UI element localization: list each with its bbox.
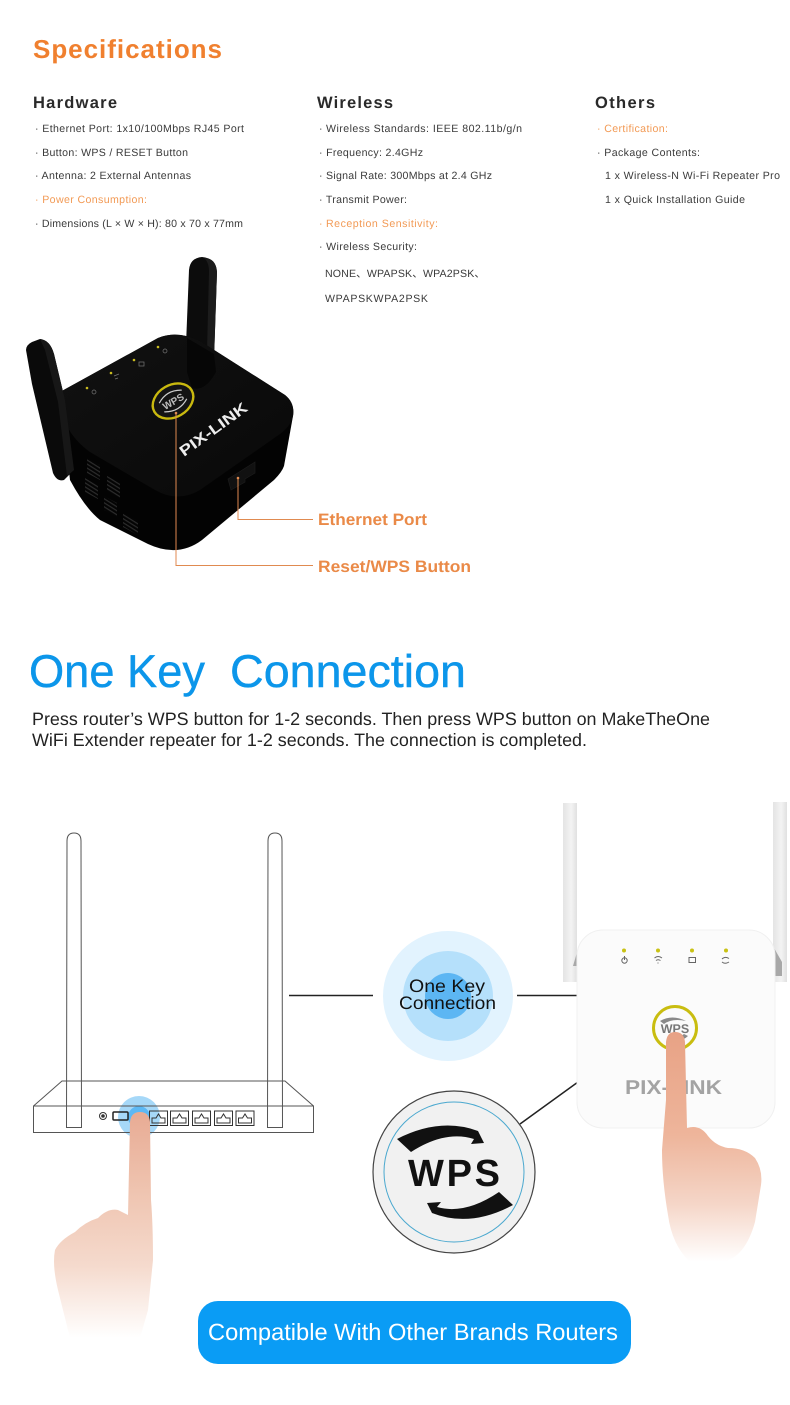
title: Specifications: Specifications — [33, 34, 222, 64]
icon: WPS magnified button — [373, 1091, 535, 1253]
text block: others list — [597, 123, 780, 206]
panel: hardware specs — [33, 94, 244, 230]
router body — [34, 1081, 314, 1132]
text block: others list: 1 x Quick Installation Guide — [605, 194, 745, 206]
text block: wireless list: · Wireless Security: — [319, 241, 417, 253]
router antennas — [66, 833, 282, 1128]
text block: hardware list — [35, 123, 244, 230]
status lights — [622, 948, 728, 952]
callout: Ethernet Port: Ethernet Port — [318, 511, 428, 529]
WPS arrows — [397, 1126, 484, 1152]
text block: others list: · Package Contents: — [597, 147, 700, 159]
WPS ring — [146, 376, 200, 426]
antenna base shadows — [573, 948, 782, 976]
heading: One Key Connection: Connection — [230, 645, 466, 697]
text block: wireless list: · Signal Rate: 300Mbps at 2.4 GHz — [319, 170, 492, 182]
callout: One Key Connection bubble — [383, 931, 513, 1061]
WPS ring — [654, 1006, 696, 1050]
brand label: PIX-LINK — [176, 399, 251, 460]
status lights — [86, 346, 159, 389]
heading: One Key Connection — [29, 645, 466, 697]
button: Compatible With Other Brands Routers — [198, 1301, 631, 1364]
text block: wireless list: · Transmit Power: — [319, 194, 407, 206]
router WPS press glow — [118, 1096, 160, 1138]
heading: Wireless: Wireless — [317, 94, 393, 112]
text block: instructions: Press router’s WPS button for 1-2 seconds. Then press WPS button on MakeTheOne — [32, 709, 710, 729]
top face — [60, 335, 293, 496]
text block: others list: · Certification: — [597, 123, 668, 135]
text block: wireless list: · Frequency: 2.4GHz — [319, 147, 423, 159]
black repeater device — [26, 257, 293, 550]
callout: Ethernet Port — [237, 477, 428, 529]
heading: Hardware: Hardware — [33, 94, 117, 112]
status icons — [92, 349, 167, 394]
text block: wireless list: Wireless Standards: IEEE 802.11b/g/n — [326, 123, 522, 135]
WPS mini label: WPS — [661, 1022, 689, 1036]
callout: Reset/WPS Button: Reset/WPS Button — [318, 558, 471, 576]
text block: hardware list: · Dimensions (L × W × H): 80 x 70 x 77mm — [35, 218, 243, 230]
text block: wireless list: · — [319, 123, 323, 135]
antenna base shadow — [187, 338, 216, 389]
USB port — [113, 1112, 128, 1120]
icon: hand pressing router — [54, 1112, 153, 1338]
left antenna — [26, 339, 74, 480]
text block: hardware list: · Ethernet Port: 1x10/100Mbps RJ45 Port — [35, 123, 244, 135]
WPS mini arrows — [660, 1018, 688, 1040]
side vents — [85, 458, 138, 535]
text block: hardware list: · Antenna: 2 External Antennas — [35, 170, 191, 182]
text block: wireless list: · — [319, 218, 323, 230]
white repeater device — [563, 802, 787, 1128]
device body — [60, 335, 293, 550]
text block: instructions: WiFi Extender repeater for 1-2 seconds. The connection is completed. — [32, 730, 587, 750]
back antenna — [186, 257, 217, 360]
text block: hardware list: · Power Consumption: — [35, 194, 147, 206]
repeater antennas — [563, 803, 577, 982]
text block: hardware list: · Button: WPS / RESET Button — [35, 147, 188, 159]
status icons — [622, 956, 729, 964]
connector lines — [289, 996, 578, 1124]
text block: wireless list: WPAPSKWPA2PSK — [325, 293, 428, 305]
ethernet port — [228, 462, 255, 490]
ethernet ports — [150, 1111, 254, 1126]
repeater body — [577, 930, 775, 1128]
heading: One Key Connection: One Key — [29, 645, 205, 697]
text block: wireless list — [319, 123, 522, 305]
text block: instructions — [32, 709, 710, 750]
text block: wireless list: NONE、WPAPSK、WPA2PSK、 — [325, 268, 485, 280]
text block: wireless list: Reception Sensitivity: — [326, 218, 438, 230]
button: Compatible With Other Brands Routers: Compatible With Other Brands Routers — [208, 1319, 618, 1345]
icon: hand pressing repeater — [662, 1032, 761, 1262]
power jack — [100, 1112, 106, 1120]
panel: other specs — [595, 94, 780, 206]
text block: others list: 1 x Wireless-N Wi-Fi Repeater Pro — [605, 170, 780, 182]
callout: One Key Connection bubble: Connection — [399, 993, 496, 1013]
brand label: PIX-LINK — [625, 1077, 723, 1099]
router line drawing — [34, 833, 314, 1132]
WPS ring: WPS — [161, 392, 187, 413]
callout: One Key Connection bubble: One Key — [409, 976, 485, 996]
callout: Reset/WPS Button — [175, 412, 471, 576]
icon: WPS magnified button: WPS — [408, 1153, 500, 1195]
heading: Others: Others — [595, 94, 655, 112]
panel: wireless specs — [317, 94, 522, 305]
